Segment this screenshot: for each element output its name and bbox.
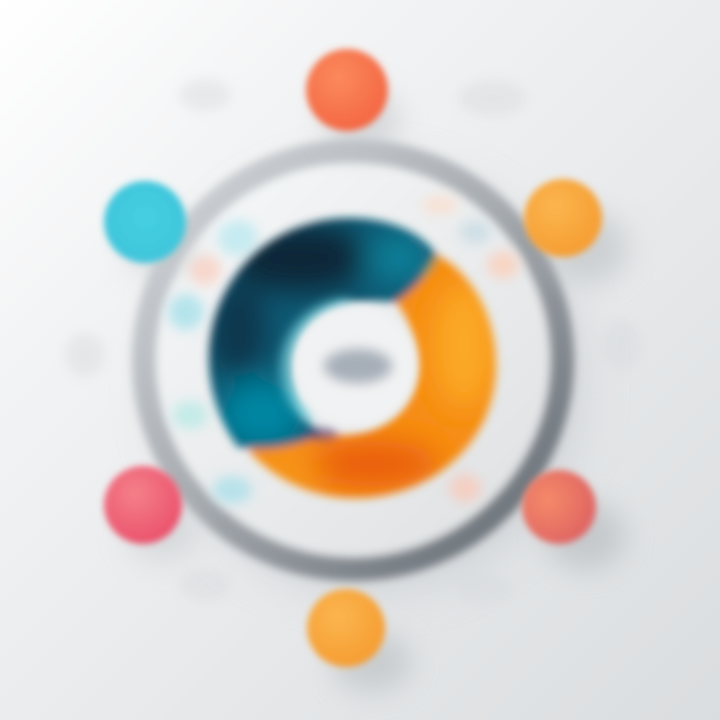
node: upper-left cyan [104, 181, 196, 277]
node: bottom orange [307, 589, 412, 692]
blurred ring segments [168, 196, 519, 504]
donut chart [205, 215, 510, 510]
node: lower-right coral [522, 470, 626, 570]
node: top orange-red [306, 49, 400, 152]
segment: orange [240, 240, 510, 510]
node: lower-left pink [104, 466, 198, 562]
node: upper-right orange [524, 179, 628, 284]
junction: green [418, 251, 442, 281]
ring drop shadow [156, 166, 584, 594]
centre circle [286, 304, 416, 427]
segment: teal [205, 215, 440, 455]
faint blurred labels around the ring [65, 79, 642, 606]
outer ring [144, 151, 562, 569]
junction: purple [306, 427, 338, 441]
centre label [324, 349, 392, 383]
